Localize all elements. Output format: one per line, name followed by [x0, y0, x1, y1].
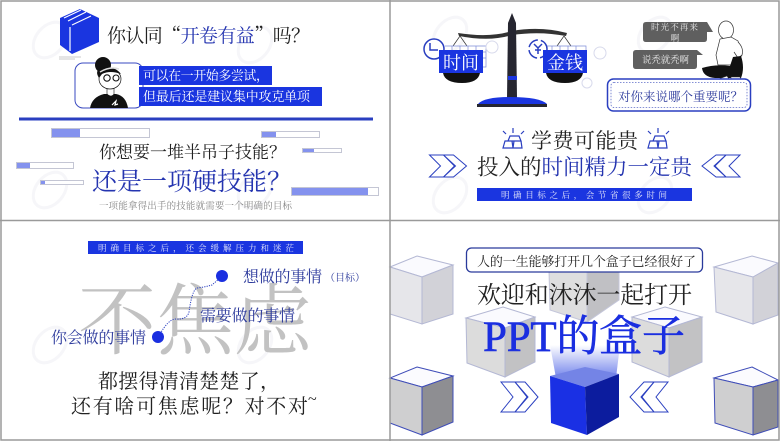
- callout: boxes in life: 人的一生能够打开几个盒子已经很好了: [477, 254, 696, 269]
- label: goal note: （目标）: [325, 271, 365, 284]
- cube: middle left: [466, 307, 535, 377]
- speech bubble: time: 时光不再来: [651, 22, 698, 32]
- callout: advice line 1: 可以在一开始多尝试，: [143, 68, 269, 84]
- cube: top right: [714, 256, 778, 324]
- icon: blue books: [59, 9, 99, 59]
- speech bubble: time: [643, 22, 713, 43]
- panel: open book question: [16, 9, 378, 212]
- caption: 一项能拿得出手的技能就需要一个明确的目标: [99, 200, 292, 212]
- heading: hard skill: 还是一项硬技能？: [92, 168, 292, 196]
- callout: question box: 对你来说哪个重要呢？: [618, 89, 743, 104]
- dot: goal: [216, 270, 228, 282]
- panel: PPT box: [390, 248, 778, 435]
- icon: clock: [424, 39, 498, 67]
- progress bars: [16, 128, 378, 196]
- banner: relieves stress: 明确目标之后，还会缓解压力和迷茫: [98, 243, 294, 254]
- heading: time and effort: 投入的时间精力一定贵: [477, 156, 693, 180]
- conclusion line 2: 还有啥可焦虑呢？对不对: [71, 395, 308, 418]
- title: 你认同“开卷有益”吗？: [107, 21, 310, 48]
- label: time: 时间: [443, 53, 479, 73]
- heading: tuition: 学费可能贵: [531, 129, 640, 153]
- avatar frame with character: [75, 57, 143, 108]
- speech bubble: hair: [633, 50, 703, 69]
- arrows: left chevrons: [630, 382, 668, 412]
- light glow: [550, 345, 620, 378]
- heading: PPT box: PPT的盒子: [483, 314, 685, 361]
- icon: gold left: [503, 128, 524, 148]
- arrows: left chevrons: [702, 155, 740, 177]
- cube: top left: [390, 256, 453, 324]
- callout: boxes in life: [466, 248, 702, 272]
- dot: start: [152, 331, 164, 343]
- speech bubble: time: 啊: [671, 33, 680, 43]
- cube: open blue box: [550, 367, 619, 435]
- cube: middle right: [632, 307, 702, 377]
- panel: no anxiety: [51, 241, 365, 418]
- banner: saves time: 明确目标之后，会节省很多时间: [501, 190, 667, 201]
- icon: gold right: [648, 128, 669, 148]
- cube: bottom left: [390, 367, 453, 435]
- arrows: right chevrons: [501, 382, 538, 412]
- arrows: right chevrons: [430, 155, 466, 177]
- icon: money: [529, 40, 606, 88]
- cube: bottom right: [714, 367, 778, 435]
- conclusion line 1: 都摆得清清楚楚了，: [98, 370, 280, 393]
- heading: half-baked skills: 你想要一堆半吊子技能？: [99, 143, 286, 162]
- heading: welcome: 欢迎和沐沐一起打开: [477, 282, 692, 309]
- dotted path: [160, 278, 220, 334]
- label: want to do: 想做的事情: [243, 267, 322, 286]
- callout: advice line 2: 但最后还是建议集中攻克单项: [143, 89, 311, 104]
- panel: time vs money: [424, 13, 750, 201]
- callout: question box: [608, 79, 750, 111]
- character: seated person: [702, 21, 743, 85]
- background word: 不焦虑: [78, 278, 313, 365]
- label: money: 金钱: [547, 53, 583, 73]
- cube: top center: [549, 270, 619, 322]
- speech bubble: hair: 说秃就秃啊: [642, 54, 689, 66]
- tilde: ~: [308, 391, 317, 408]
- label: can do: 你会做的事情: [51, 329, 146, 347]
- icon: balance scale: [443, 13, 583, 107]
- label: need to do: 需要做的事情: [200, 307, 295, 325]
- banner: saves time: [477, 188, 692, 201]
